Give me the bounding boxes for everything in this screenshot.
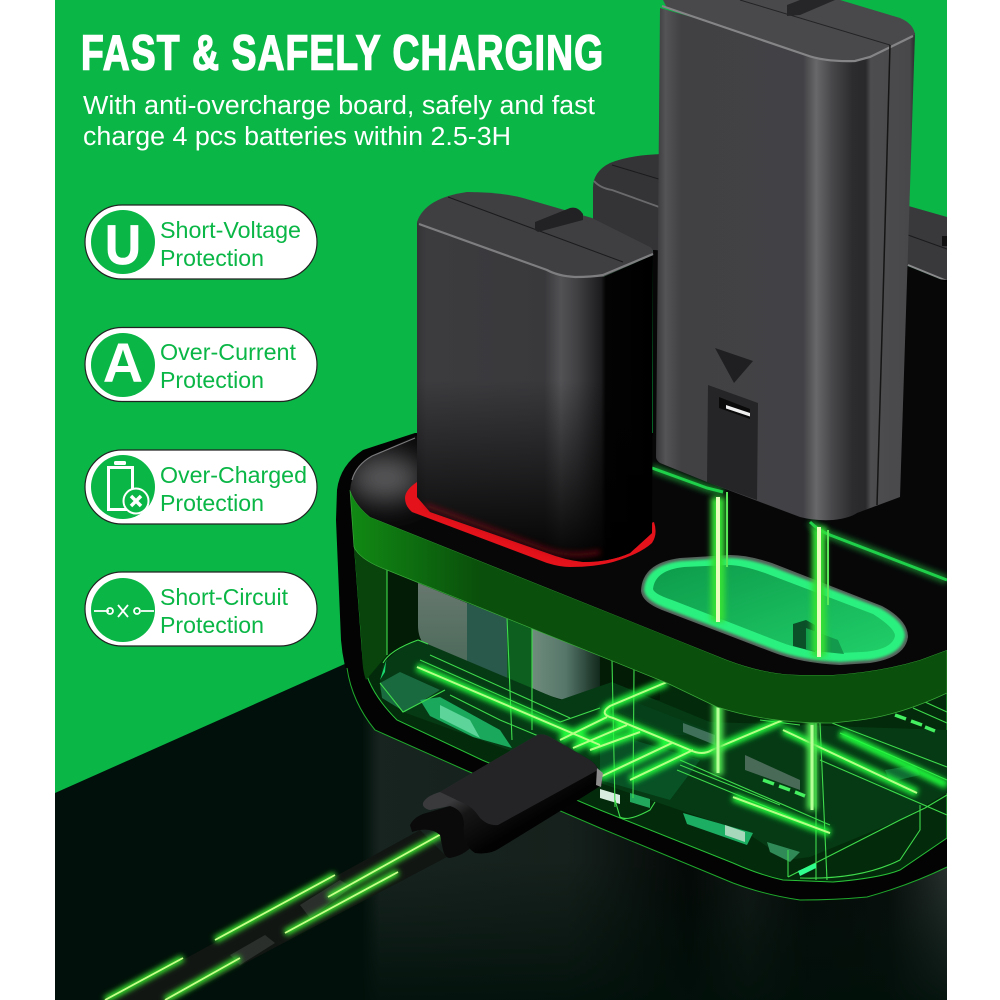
plug body side — [423, 734, 602, 853]
battery tab — [535, 208, 583, 232]
badge: over-current protection — [85, 328, 317, 402]
raised battery — [656, 0, 915, 520]
bright trace core — [417, 667, 917, 833]
charging dock — [336, 250, 947, 900]
cable cord — [110, 830, 447, 1000]
USB-C cable — [105, 734, 603, 1000]
subtitle: charge 4 pcs batteries within 2.5-3H — [83, 123, 511, 151]
badge: short-voltage protection: Protection — [160, 245, 264, 271]
subtitle — [83, 92, 595, 151]
battery tab — [787, 0, 835, 16]
charging light beams — [711, 492, 829, 657]
green glowing slot — [641, 555, 908, 665]
circuit board — [380, 640, 947, 862]
subtitle: With anti-overcharge board, safely and fast — [83, 92, 595, 120]
green light lines on lid — [652, 468, 947, 580]
badge: short-voltage protection: Short-Voltage — [160, 217, 301, 243]
internal battery — [418, 583, 600, 702]
badge: short-circuit protection: Short-Circuit — [160, 584, 289, 610]
back battery (left) — [593, 154, 662, 255]
plug metal tip — [596, 768, 603, 787]
USB port tab — [707, 385, 758, 500]
badge: over-current protection: Protection — [160, 367, 264, 393]
dock transparent interior — [354, 540, 947, 882]
badge: over-current protection: A — [103, 331, 143, 394]
lid top surface — [347, 250, 947, 675]
bright trace glow — [417, 667, 947, 833]
red glow at battery base — [425, 505, 600, 555]
title: FAST & SAFELY CHARGING — [81, 27, 603, 81]
plug body top face — [440, 734, 598, 825]
badge: short-circuit protection: Protection — [160, 612, 264, 638]
circuit thin traces — [380, 570, 947, 880]
white margins — [0, 0, 55, 1000]
arrow mark — [715, 348, 753, 383]
lid side band — [350, 490, 947, 723]
icon: battery with cross — [108, 461, 148, 514]
glowing dashes — [763, 715, 935, 796]
badge: short-circuit protection — [85, 572, 317, 646]
dark floor — [55, 663, 947, 1000]
front battery — [417, 192, 653, 562]
red charging slot — [405, 482, 656, 567]
badge: over-current protection: Over-Current — [160, 339, 297, 365]
icon: open circuit — [94, 605, 154, 617]
under-lid light beams — [713, 700, 817, 810]
cable glow lines — [105, 833, 443, 1000]
back battery (right) — [905, 205, 947, 282]
lit corner of board — [798, 863, 816, 876]
badge: short-voltage protection: U — [105, 213, 141, 276]
badge: short-voltage protection — [85, 205, 317, 279]
badge: over-charged protection: Over-Charged — [160, 462, 307, 488]
badge: over-charged protection — [85, 450, 317, 524]
plug boot — [410, 803, 473, 858]
badge: over-charged protection: Protection — [160, 490, 264, 516]
dock outer shell — [336, 250, 947, 900]
